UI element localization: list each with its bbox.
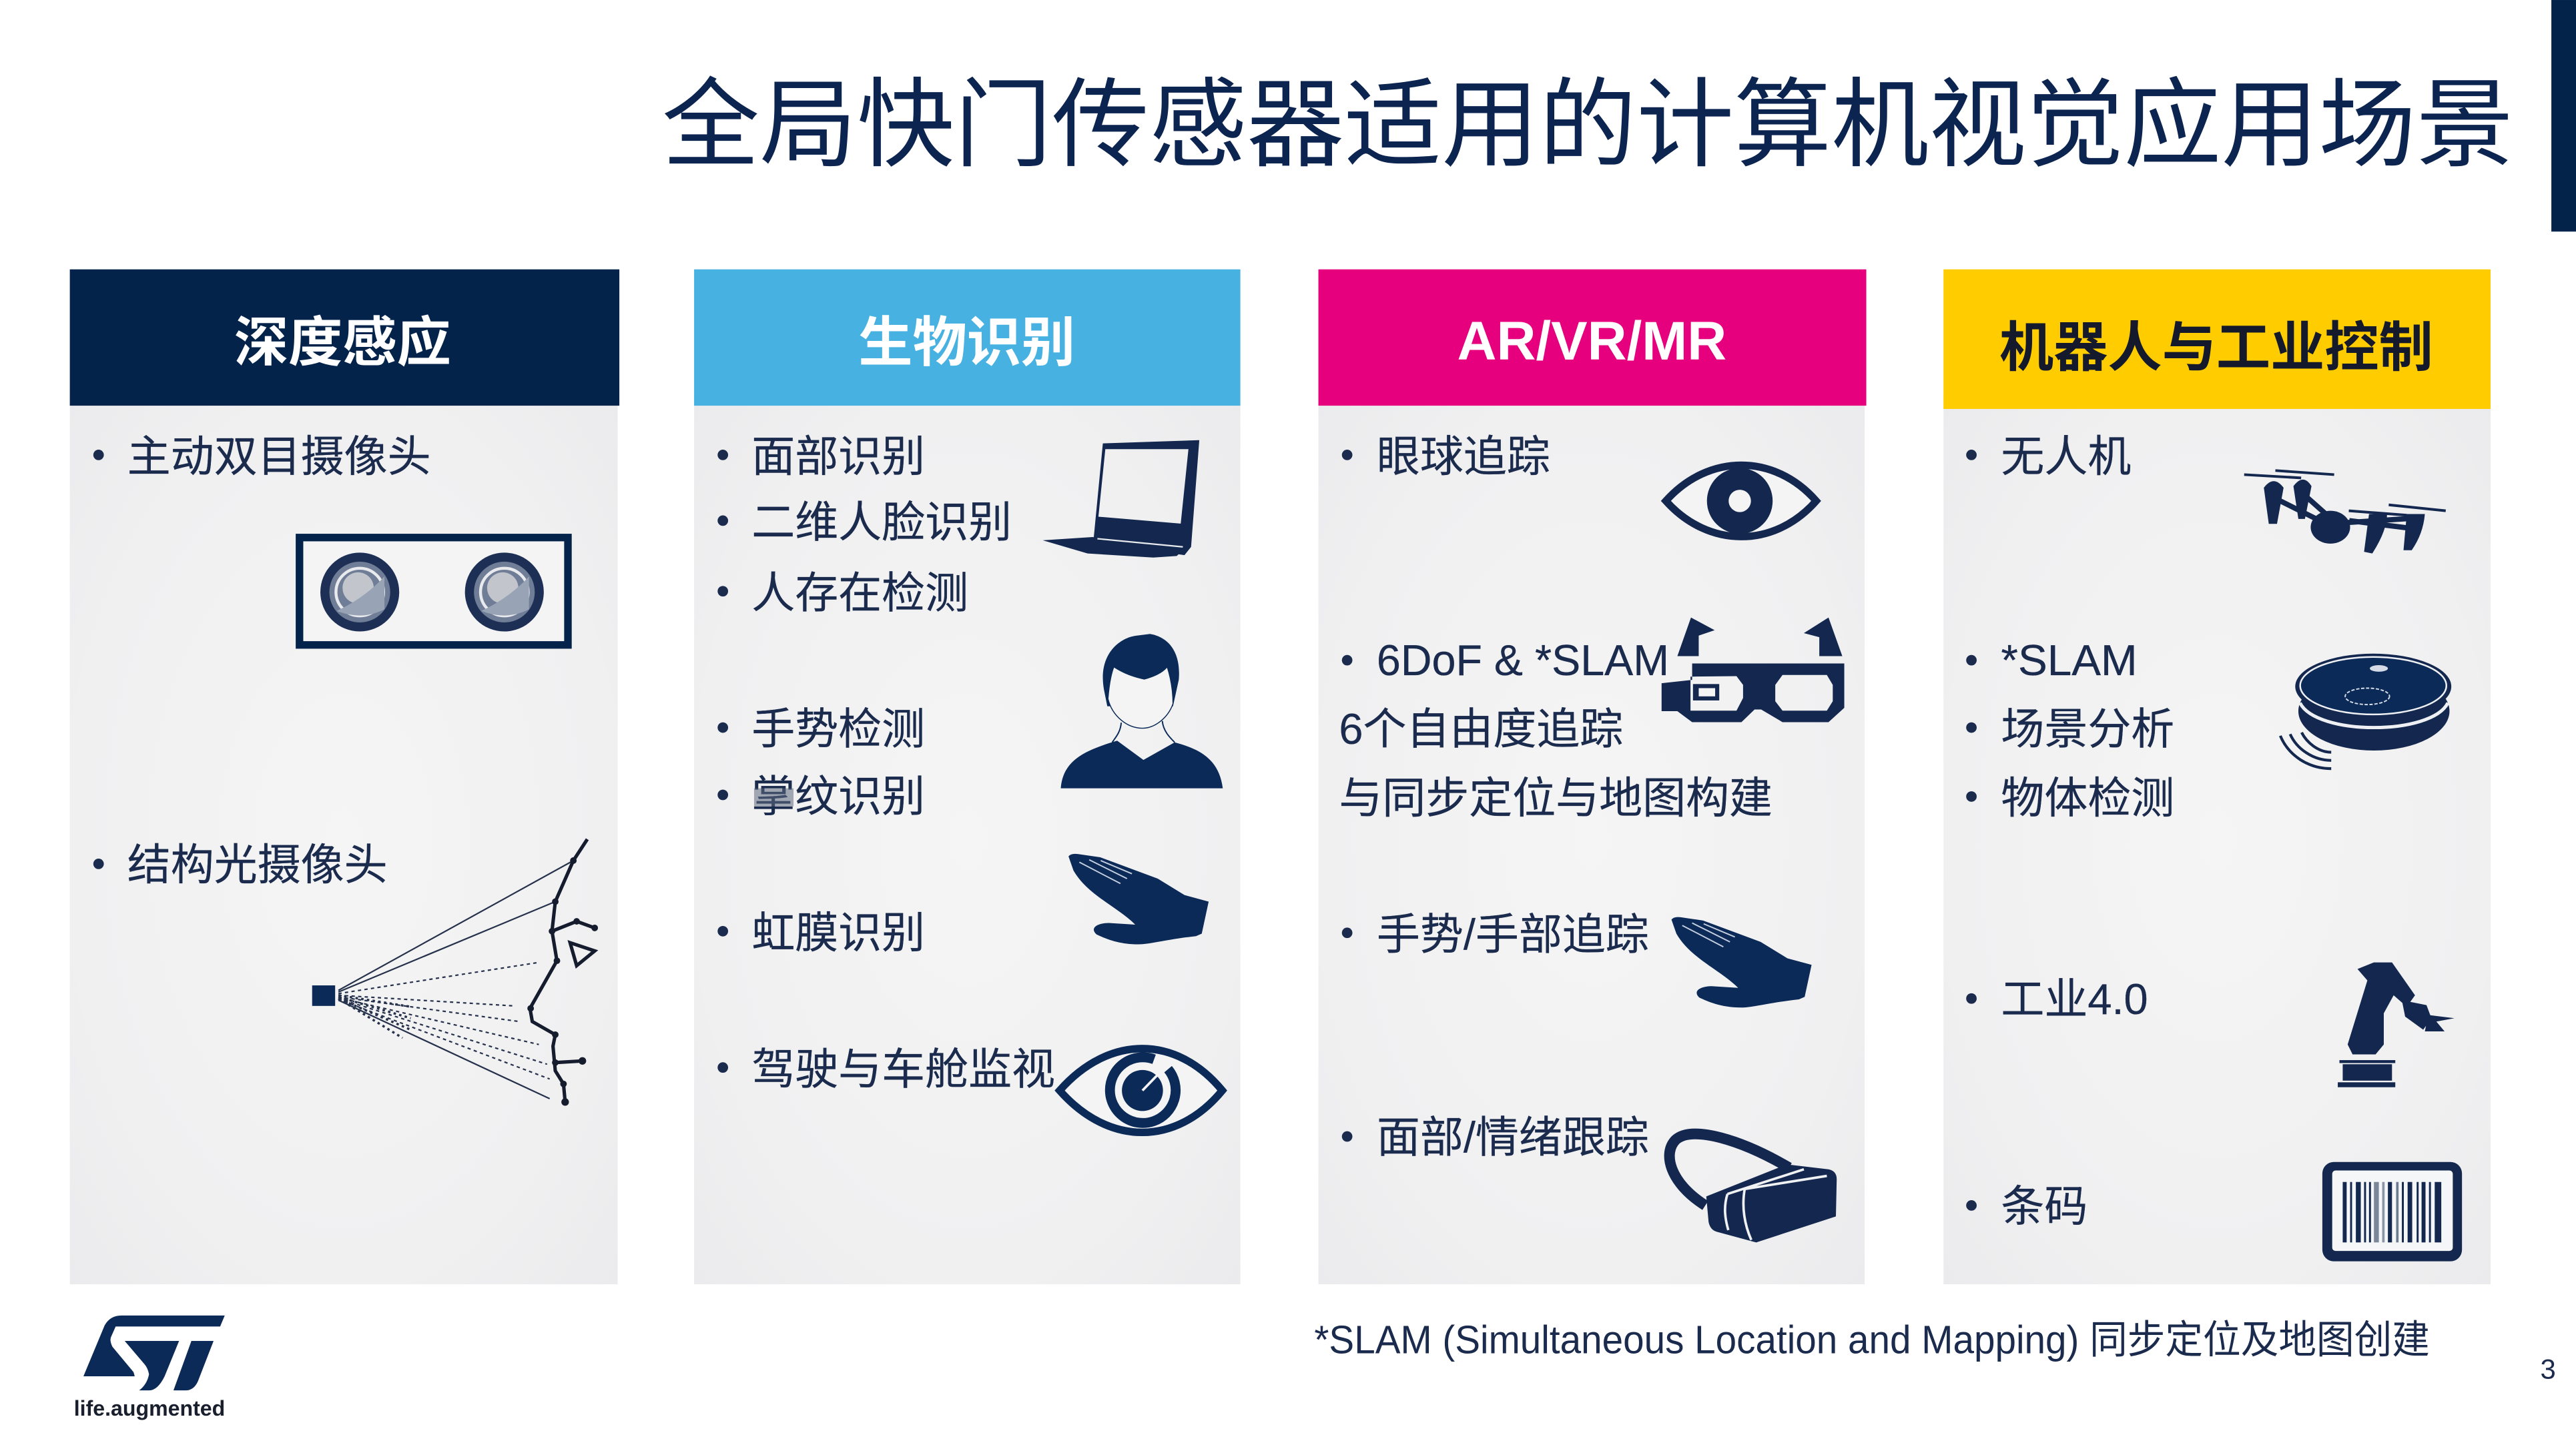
item: active stereo camera: 主动双目摄像头 [127, 432, 431, 481]
item: face and emotion tracking: 面部/情绪跟踪 [1377, 1113, 1649, 1161]
item: face recognition: 面部识别 [751, 432, 925, 481]
title: 全局快门传感器适用的计算机视觉应用场景 [662, 71, 2513, 179]
icon: stereo camera [300, 538, 568, 645]
icon: laptop [1042, 440, 1199, 558]
heading: depth sensing: 深度感应 [234, 313, 451, 374]
logo tagline: life.augmented [74, 1396, 225, 1420]
item: scene analysis: 场景分析 [2001, 704, 2174, 753]
item: gesture detection: 手势检测 [751, 704, 925, 753]
item: eye tracking: 眼球追踪 [1377, 432, 1550, 481]
panel: AR VR MR [1319, 270, 1867, 1284]
icon: robotic arm [2338, 963, 2455, 1087]
icon: smart glasses [1662, 618, 1845, 722]
icon: person [1061, 634, 1223, 789]
icon: robot vacuum [2280, 654, 2451, 769]
icon: hand [1672, 917, 1812, 1007]
panel: biometrics [694, 270, 1241, 1284]
text: 6DoF explanation line: 6个自由度追踪 [1339, 704, 1623, 753]
item: iris recognition: 虹膜识别 [751, 908, 925, 957]
corner accent bar [2551, 0, 2576, 231]
item: 6DoF and SLAM: 6DoF & *SLAM [1377, 636, 1669, 684]
item: structured light camera: 结构光摄像头 [127, 840, 388, 889]
icon: eye [1666, 465, 1816, 536]
item: human presence detection: 人存在检测 [751, 568, 968, 617]
item: driver and cabin monitoring: 驾驶与车舱监视 [751, 1045, 1055, 1093]
heading: biometrics: 生物识别 [858, 313, 1075, 374]
icon: eye with iris [1060, 1049, 1223, 1132]
item: barcode: 条码 [2001, 1181, 2087, 1230]
item: palm print recognition: 掌纹识别 [751, 772, 925, 821]
item: gesture and hand tracking: 手势/手部追踪 [1377, 910, 1649, 959]
heading: robotics and industrial control: 机器人与工业控制 [1999, 318, 2433, 378]
panel: depth sensing [70, 270, 619, 1284]
item: Industry 4.0: 工业4.0 [2001, 975, 2148, 1023]
logo: ST life.augmented [74, 1316, 225, 1420]
panel: robotics and industrial control [1943, 270, 2491, 1284]
icon: drone [2244, 470, 2446, 554]
page number: 3 [2541, 1354, 2556, 1385]
item: SLAM: *SLAM [2001, 636, 2138, 684]
item: object detection: 物体检测 [2001, 774, 2174, 823]
item: drones: 无人机 [2001, 432, 2131, 481]
heading: AR VR MR: AR/VR/MR [1458, 311, 1726, 372]
item: 2D face recognition: 二维人脸识别 [751, 498, 1012, 546]
icon: barcode [2322, 1162, 2462, 1262]
footnote: *SLAM (Simultaneous Location and Mapping) 同步定位及地图创建 [1314, 1318, 2430, 1362]
icon: structured light projection on a face [312, 839, 598, 1106]
text: SLAM explanation line: 与同步定位与地图构建 [1339, 774, 1773, 823]
icon: VR headset [1670, 1134, 1837, 1242]
icon: hand [1068, 854, 1209, 945]
